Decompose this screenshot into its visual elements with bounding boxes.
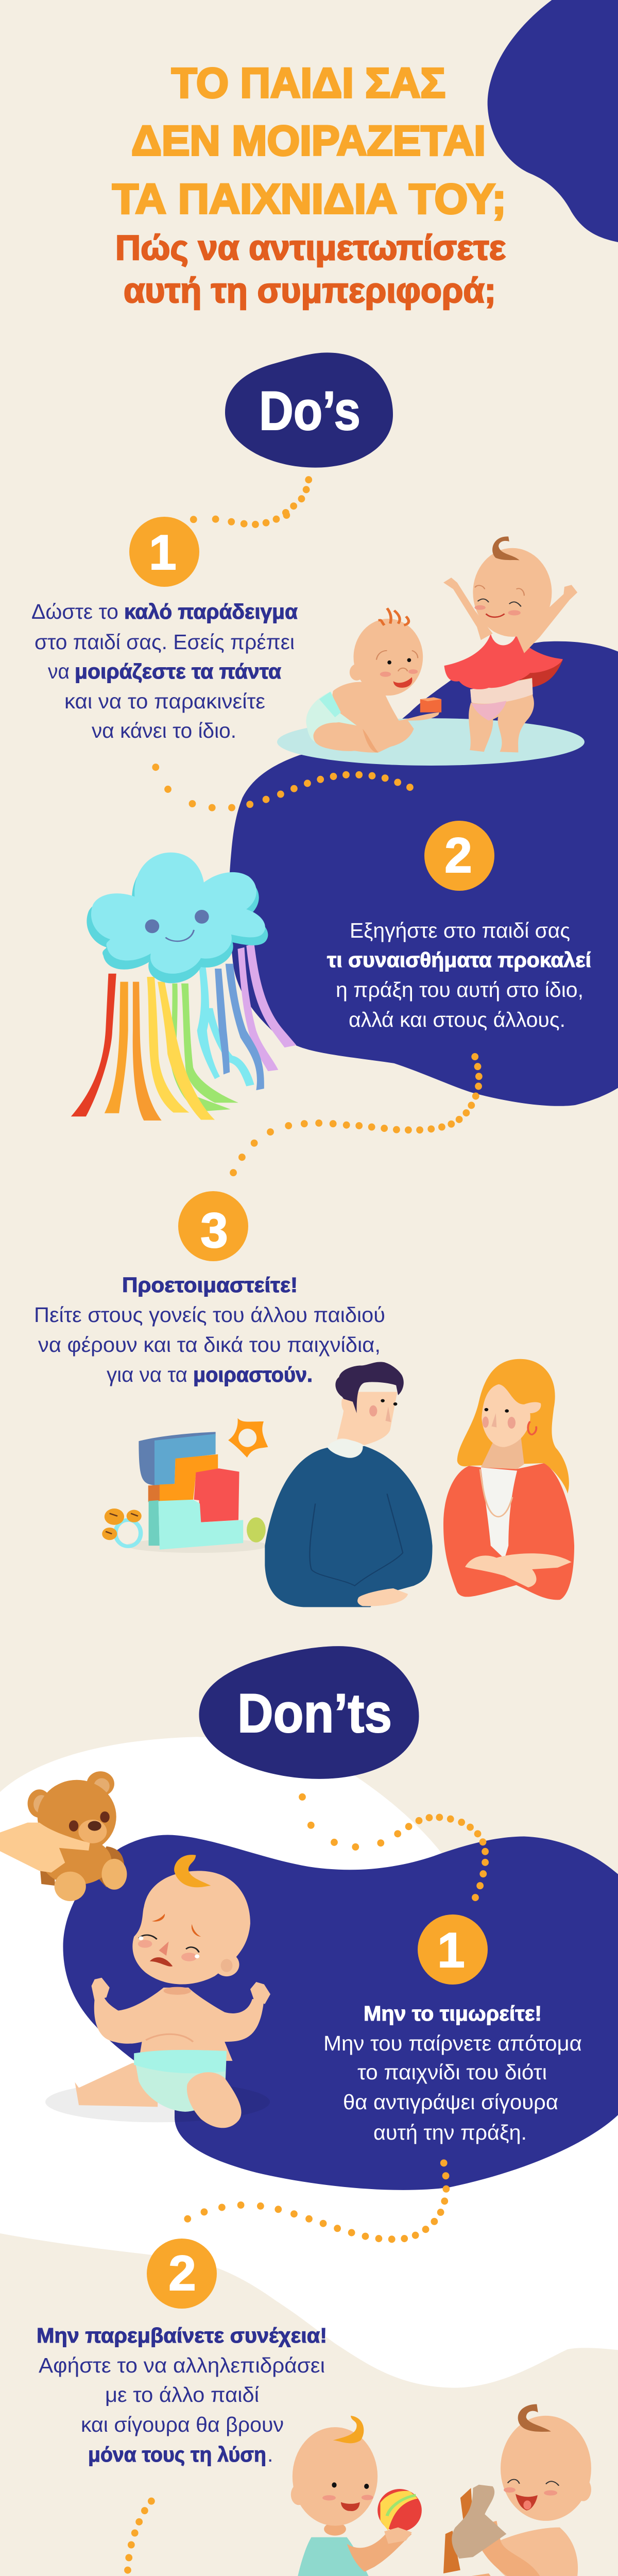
panel: blue blob behind step 2 [229,641,618,1106]
illustration: crying baby [45,1855,270,2128]
text: step 2: τι συναισθήματα προκαλεί [327,948,591,972]
illustration: teddy bear held by hand [0,1771,127,1901]
text: don't 2: . [267,2443,273,2466]
text: don't 1: Μην το τιμωρείτε! [364,2002,542,2025]
step 3 badge [178,1191,248,1261]
text: don't 2: Μην παρεμβαίνετε συνέχεια! [37,2324,327,2347]
decorative blob: top right [488,0,618,242]
text: step 1: στο παιδί σας. Εσείς πρέπει [35,630,295,654]
step 2 badge: 2 [444,828,472,883]
don't 2 badge [147,2239,217,2309]
text: don't 2: με το άλλο παιδί [105,2383,259,2406]
panel: blue blob behind Don't 1 [63,1835,618,2190]
text: step 1: Δώστε το [31,600,118,623]
text: step 1: να [48,659,70,683]
text: step 1: να κάνει το ίδιο. [92,719,236,742]
step 2 badge [424,821,494,891]
step 1 badge: 1 [149,525,177,580]
subtitle: αυτή τη συμπεριφορά; [124,271,496,310]
heading: Do's [225,352,393,468]
step 3 illustration: toys [102,1418,268,1553]
text: don't 2: και σίγουρα θα βρουν [81,2413,284,2436]
text: step 3 [34,1273,385,1386]
text: step 2: η πράξη του αυτή στο ίδιο, [336,978,583,1002]
text: step 3: Προετοιμαστείτε! [122,1273,298,1297]
title: ΔΕΝ ΜΟΙΡΑΖΕΤΑΙ [131,117,486,164]
illustration: two babies on a mat [277,536,585,766]
text: don't 1 [323,2002,582,2144]
don't 1 badge: 1 [437,1923,465,1978]
text: step 3: Πείτε στους γονείς του άλλου παιδιού [34,1303,385,1327]
text: step 1: καλό παράδειγμα [124,600,298,623]
title [112,60,506,223]
text: don't 1: Μην του παίρνετε απότομα [323,2031,582,2055]
text: step 2 [327,919,591,1031]
title: ΤΟ ΠΑΙΔΙ ΣΑΣ [171,60,445,107]
heading: Don'ts: Don’ts [237,1682,392,1744]
step 1 badge [129,517,199,587]
text: step 3: μοιραστούν. [193,1363,313,1386]
text: don't 1: το παιχνίδι του διότι [357,2060,547,2084]
background: white wave behind Don'ts section [0,1737,618,2388]
text: step 1: μοιράζεστε τα πάντα [75,659,281,683]
dotted connectors [124,476,489,2576]
subtitle: Πώς να αντιμετωπίσετε [115,228,506,267]
heading: Do's: Do’s [259,380,360,442]
title: ΤΑ ΠΑΙΧΝΙΔΙΑ ΤΟΥ; [112,176,506,223]
don't 2 badge: 2 [168,2246,196,2301]
step 3 badge: 3 [200,1203,228,1258]
text: step 2: Εξηγήστε στο παιδί σας [350,919,570,942]
step 3 illustration: father [265,1362,433,1607]
don't 1 badge [418,1914,488,1985]
step 3 illustration: mother [443,1359,574,1600]
heading: Don'ts [199,1646,419,1779]
text: don't 2: μόνα τους τη λύση [88,2443,266,2466]
text: don't 2 [37,2324,327,2466]
text: don't 1: θα αντιγράψει σίγουρα [343,2090,558,2114]
illustration: two babies playing with toys [186,2404,606,2576]
illustration: rainbow cloud [71,853,297,1121]
subtitle [115,228,506,310]
text: don't 2: Αφήστε το να αλληλεπιδράσει [39,2353,325,2377]
text: don't 1: αυτή την πράξη. [373,2121,527,2144]
text: step 2: αλλά και στους άλλους. [349,1008,565,1031]
text: step 1 [31,600,298,742]
text: step 1: και να το παρακινείτε [64,689,265,713]
text: step 3: να φέρουν και τα δικά του παιχνίδια, [38,1333,381,1357]
text: step 3: για να τα [107,1363,187,1386]
